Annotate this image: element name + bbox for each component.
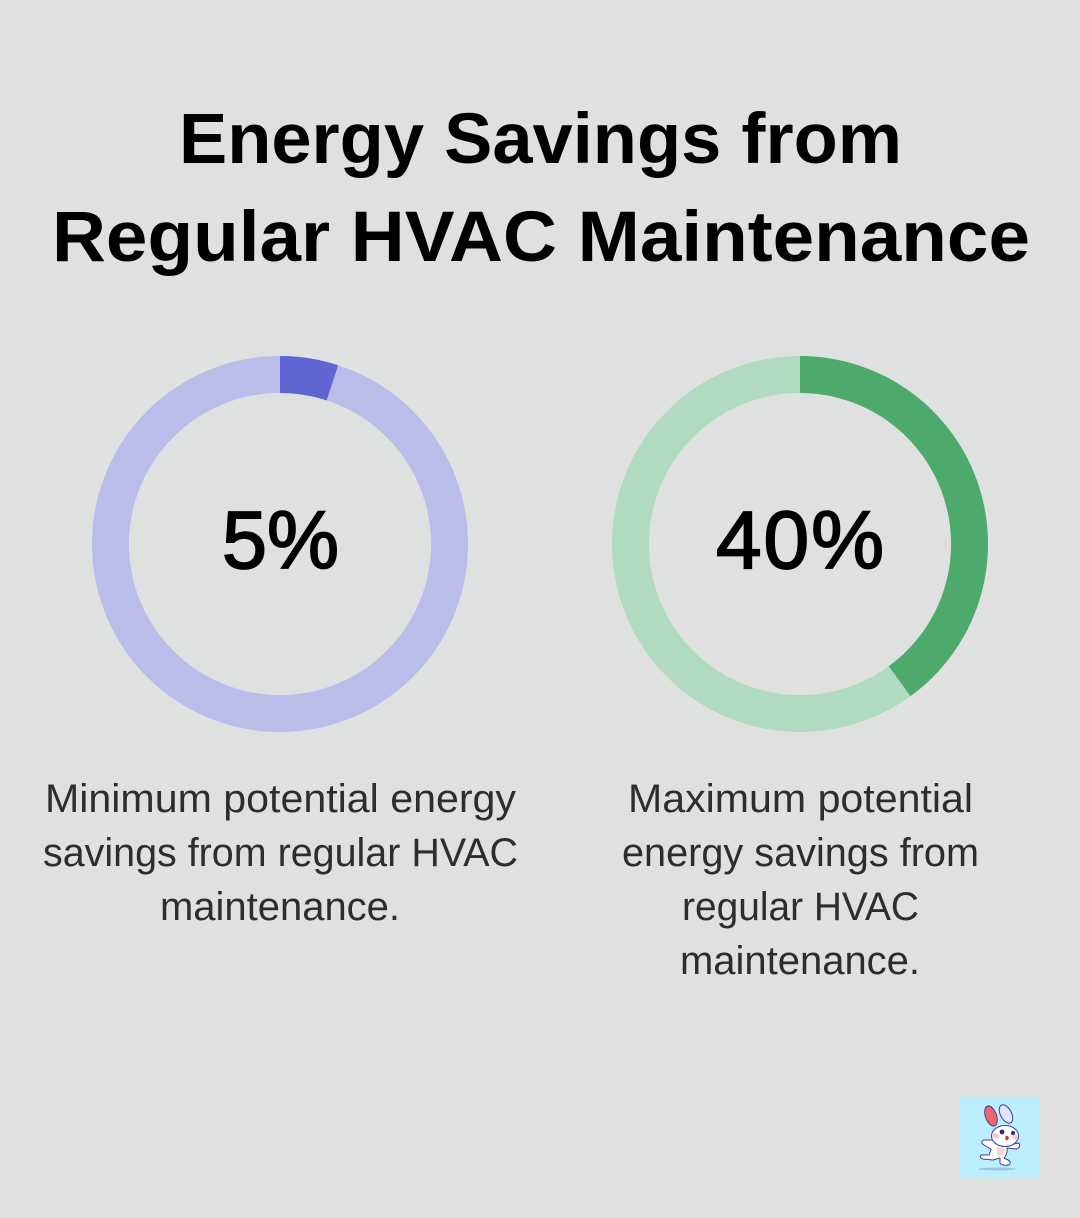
description: maximum savings bbox=[622, 777, 979, 983]
value: 5%: 5% bbox=[222, 495, 339, 586]
description: minimum savings bbox=[43, 777, 518, 929]
title bbox=[52, 100, 1030, 277]
description: minimum savings: maintenance. bbox=[160, 885, 400, 929]
description: maximum savings: regular HVAC bbox=[682, 885, 919, 929]
donut chart: 5% bbox=[110, 356, 450, 714]
description: minimum savings: Minimum potential energy bbox=[45, 777, 516, 821]
panel: 40% maximum savings bbox=[622, 356, 988, 983]
description: maximum savings: maintenance. bbox=[680, 939, 920, 983]
donut chart: 40% bbox=[630, 356, 988, 714]
title: Energy Savings from bbox=[179, 100, 902, 179]
description: maximum savings: energy savings from bbox=[622, 831, 979, 875]
icon: bunny logo bbox=[960, 1098, 1040, 1178]
value: 40%: 40% bbox=[716, 495, 884, 586]
title: Regular HVAC Maintenance bbox=[52, 198, 1030, 277]
description: minimum savings: savings from regular HVAC bbox=[43, 831, 518, 875]
description: maximum savings: Maximum potential bbox=[628, 777, 973, 821]
panel: 5% minimum savings bbox=[43, 356, 518, 929]
